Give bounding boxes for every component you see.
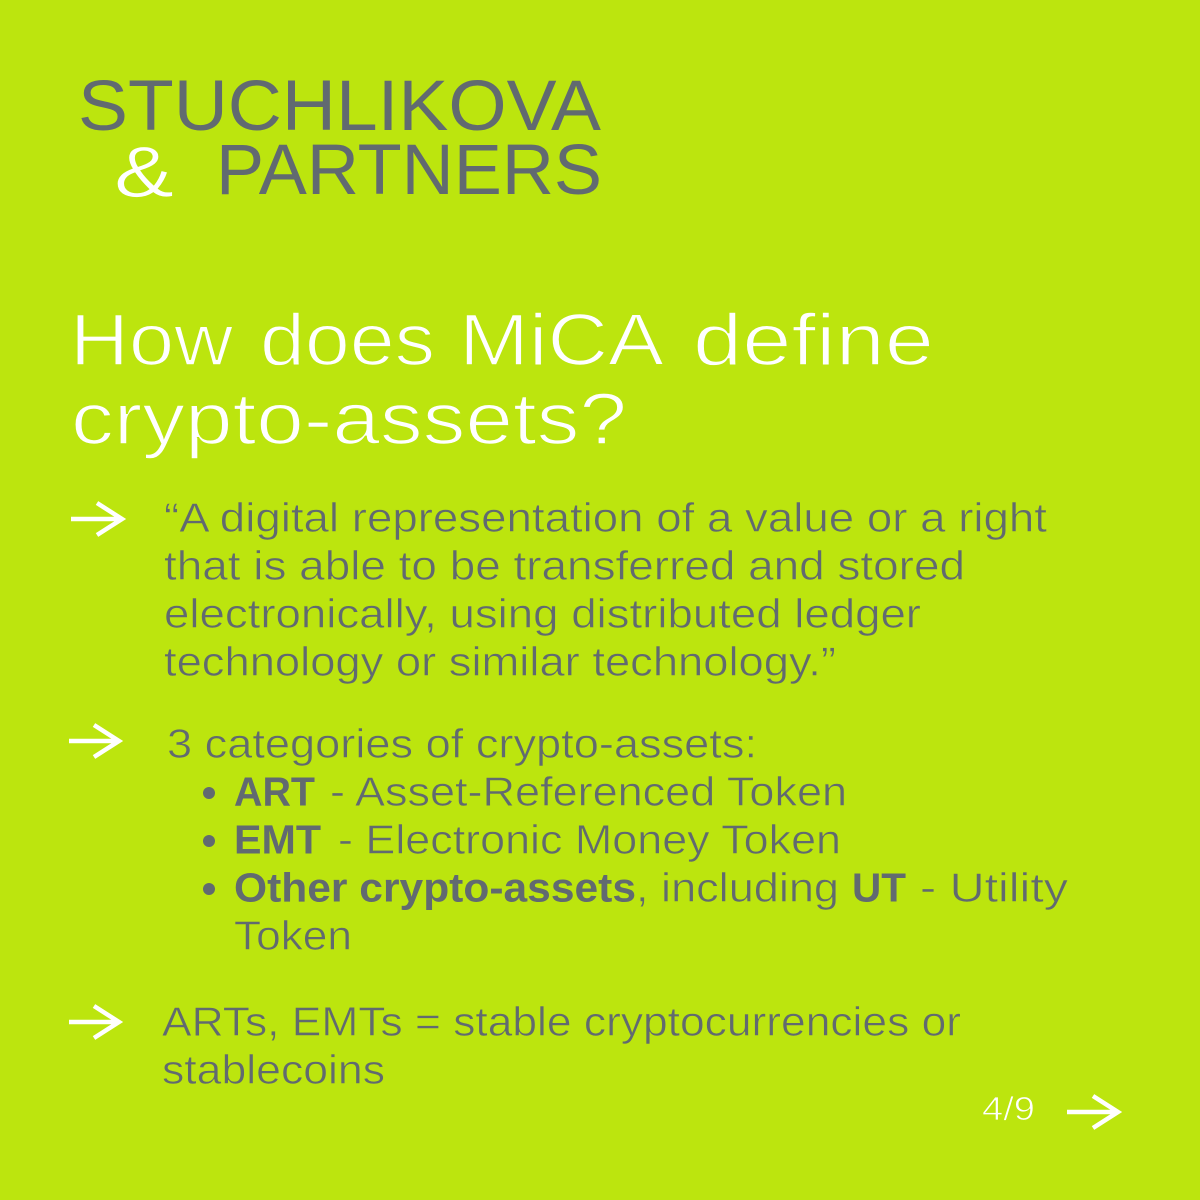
text block: definition quote: “A digital representation of a value or a right [164,494,1048,540]
list: categories of crypto-assets: , including [636,864,839,910]
text block: definition quote: technology or similar technology.” [164,638,836,684]
icon: arrow, categories [69,725,119,757]
list: categories of crypto-assets: ART [234,768,315,814]
text block: stablecoins: ARTs, EMTs = stable cryptocurrencies or [162,998,961,1044]
text block: definition quote [164,494,1048,684]
logo ampersand: & [114,133,174,213]
text block: stablecoins: stablecoins [162,1046,385,1092]
text block: definition quote: that is able to be transferred and stored [164,542,965,588]
list: categories of crypto-assets: 3 categories of crypto-assets: [167,720,757,766]
list: categories of crypto-assets [167,720,1069,958]
list: categories of crypto-assets: EMT [234,816,321,862]
title: does [260,300,435,381]
icon: arrow, definition [71,503,122,535]
list: categories of crypto-assets: UT [852,864,906,910]
page number: 4/9 [982,1090,1035,1127]
logo: Stuchlikova & Partners: PARTNERS [216,131,602,210]
title [70,300,934,460]
list: categories of crypto-assets: - Electronic Money Token [338,816,841,862]
logo: Stuchlikova & Partners [78,67,602,213]
list: categories of crypto-assets: - Asset-Referenced Token [330,768,847,814]
title: MiCA [459,300,664,381]
list: categories of crypto-assets: - Utility [920,864,1069,910]
title: define [693,300,934,381]
title: How [70,300,233,381]
logo: Stuchlikova & Partners: STUCHLIKOVA [78,67,602,146]
icon: arrow, next page [1067,1096,1118,1128]
title: crypto-assets? [71,379,627,460]
icon: arrow, stablecoins [69,1006,119,1038]
text block: definition quote: electronically, using distributed ledger [164,590,921,636]
list: categories of crypto-assets: Other crypto-assets [234,864,636,910]
text block: stablecoins [162,998,961,1092]
list: categories of crypto-assets: Token [234,912,352,958]
